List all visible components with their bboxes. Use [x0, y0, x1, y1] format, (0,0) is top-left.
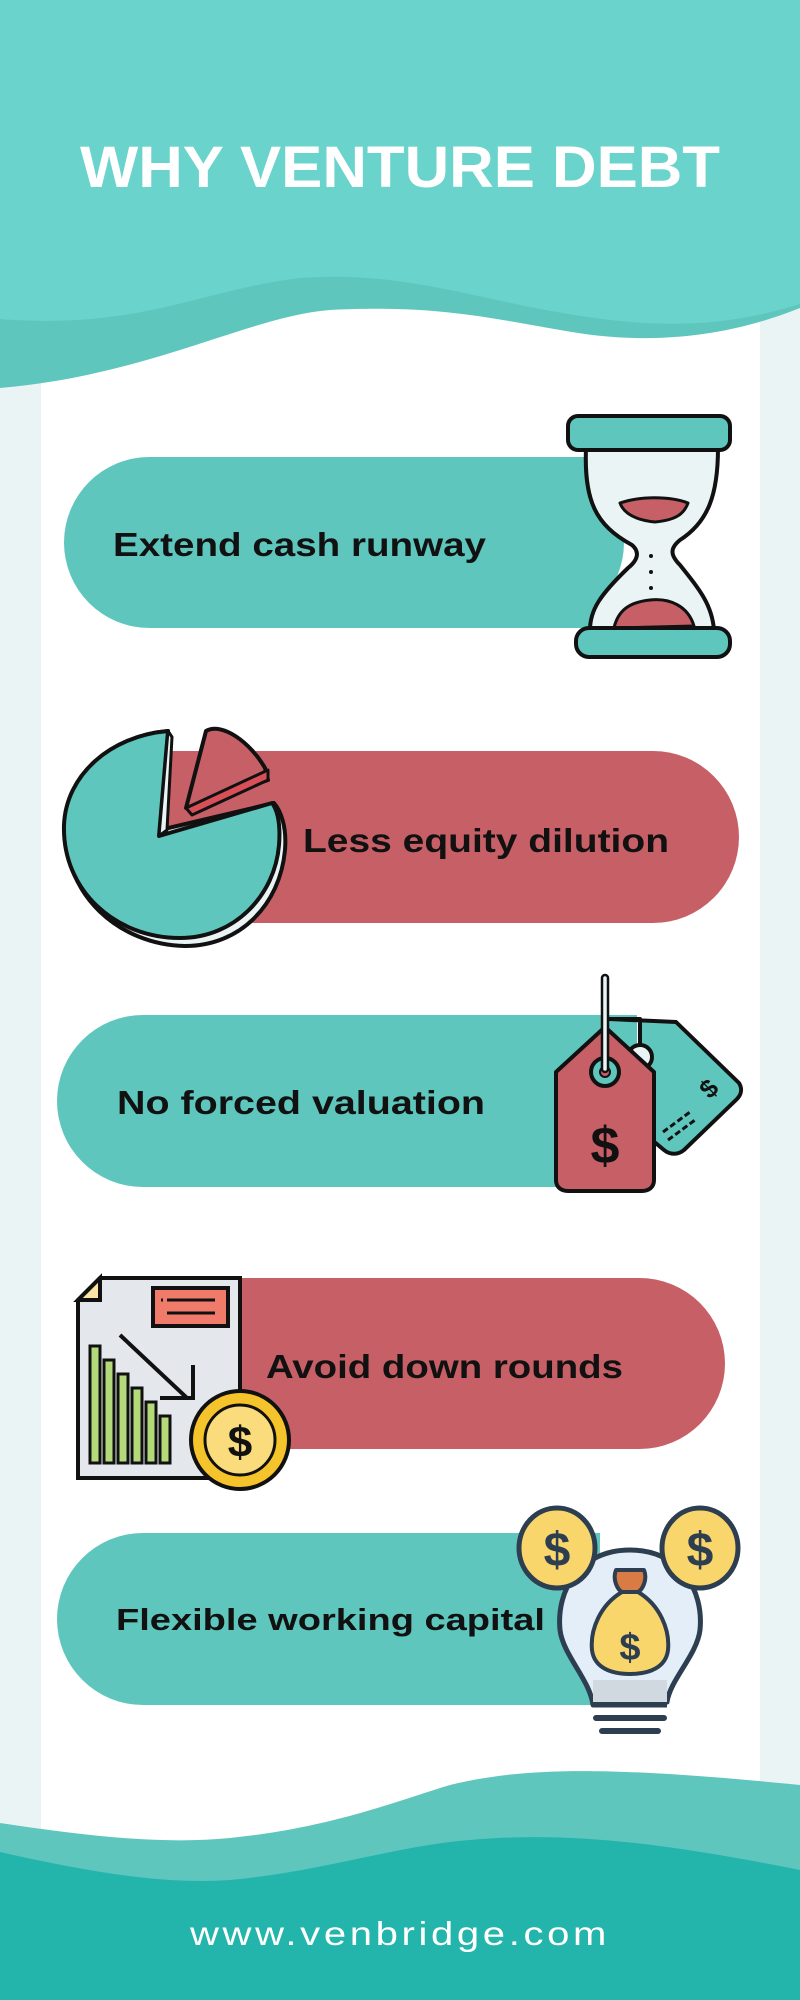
icon: hourglass: [568, 416, 730, 657]
icon: declining chart with coin: $: [228, 1418, 252, 1467]
icon: light bulb with money: [519, 1508, 738, 1731]
icon: light bulb with money: $: [687, 1524, 714, 1577]
icon: price tags: $: [591, 1117, 620, 1175]
header: [0, 0, 800, 388]
footer: [0, 1771, 800, 2000]
panel: extend cash runway: [64, 416, 730, 657]
text: avoid down rounds: Avoid down rounds: [266, 1348, 623, 1385]
text: flexible working capital: Flexible working capital: [116, 1602, 545, 1637]
icon: price tags: $: [693, 1072, 725, 1104]
icon: declining chart with coin: [78, 1278, 289, 1489]
panel: less equity dilution: [64, 729, 739, 946]
icon: light bulb with money: $: [544, 1524, 571, 1577]
footer url: www.venbridge.com: [189, 1915, 610, 1952]
title: WHY VENTURE DEBT: [80, 135, 720, 200]
icon: price tags: [556, 975, 741, 1191]
panel: flexible working capital: [57, 1508, 738, 1731]
icon: light bulb with money: $: [619, 1627, 641, 1669]
text: less equity dilution: Less equity dilution: [303, 822, 669, 859]
panel: avoid down rounds: [78, 1278, 725, 1489]
icon: pie chart: [64, 729, 285, 946]
panel: no forced valuation: [57, 975, 741, 1191]
text: no forced valuation: No forced valuation: [117, 1084, 485, 1121]
text: extend cash runway: Extend cash runway: [113, 526, 487, 563]
